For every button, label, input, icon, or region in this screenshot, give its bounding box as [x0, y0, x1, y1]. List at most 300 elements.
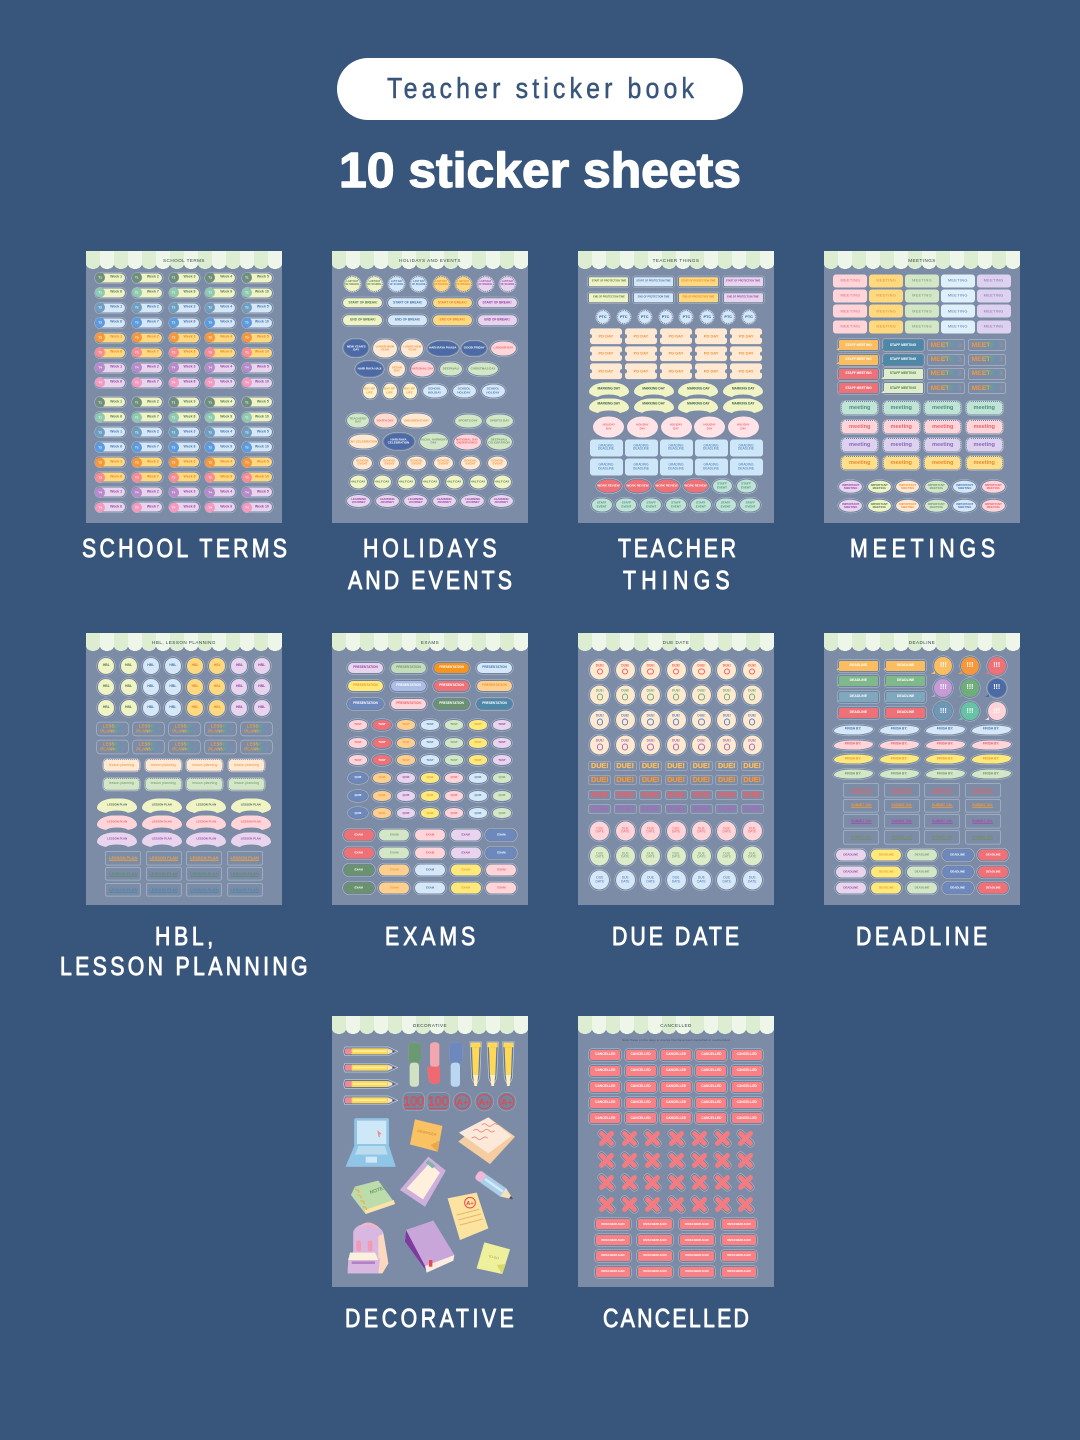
finish by pink [824, 740, 1020, 749]
HBL blobs row 1: HBL [103, 663, 110, 667]
lowercase meeting scalloped row 4: meeting [849, 460, 870, 466]
due date pink circles: DATE [596, 830, 604, 834]
blue alarm clock circles: DUE! [596, 714, 604, 718]
deadline flags steel [836, 692, 928, 702]
exam pills row 4: EXAM [497, 886, 506, 890]
test labels row 2: TEST [426, 740, 434, 744]
grading deadline row 1: GRADING [599, 443, 613, 447]
staff meeting bubbles and rainbow meeting row 4: STAFF MEETING [890, 386, 916, 390]
presentation pills row 2: PRESENTATION [396, 683, 421, 687]
term 2 week stickers 6-10: T2 [172, 321, 175, 325]
sheet title: CANCELLED [660, 1023, 692, 1028]
rescheduled labels row 3 [578, 1251, 774, 1261]
last day of school flowers: LAST DAY OF SCHOOL [478, 280, 493, 286]
term 4 week stickers 1-5: T4 [245, 366, 249, 370]
start of break stickers: START OF BREAK! [393, 300, 422, 304]
grading deadline row 2: GRADING [599, 463, 613, 467]
grading deadline row 1: DEADLINE [738, 447, 754, 451]
term 4 week stickers 1-5: T4 [208, 366, 212, 370]
due red labels: DUE! [642, 790, 659, 799]
work review and staff event stickers: STAFF EVENT [717, 482, 727, 489]
PD day tickets row 3 [590, 363, 762, 380]
red cross stickers row 4 [578, 1194, 774, 1214]
lesson plan bananas yellow: LESSON PLAN [152, 802, 172, 806]
PTC flowers: PTC [683, 315, 690, 319]
second set term 1 weeks 6-10: Week 9 [220, 414, 232, 418]
term 3 week stickers 6-10: T3 [208, 351, 212, 355]
start of protection time flags: START OF PROTECTION TIME [636, 279, 671, 282]
term 4 week stickers 1-5 [94, 362, 274, 374]
test labels row 3: TEST [450, 758, 458, 762]
cancelled labels row 2 [578, 1066, 774, 1076]
awning header [578, 251, 774, 269]
deadline pills row 1: DEADLINE [879, 853, 894, 857]
due purple labels: DUE! [616, 804, 634, 813]
green alarm clock circles: DUE! [723, 689, 731, 693]
second set term 4 weeks 6-10: Week 9 [220, 504, 232, 508]
grading deadline row 2: GRADING [739, 463, 753, 467]
second set term 1 weeks 1-5: T1 [135, 400, 139, 404]
due purple labels: DUE! [743, 804, 761, 813]
term 1 week stickers 1-5 [94, 272, 274, 284]
red alarm clock circles: DUE! [647, 663, 655, 667]
due yellow labels: DUE! [642, 761, 659, 770]
presentation pills row 1 [332, 663, 528, 673]
deadline pills row 1: DEADLINE [915, 853, 929, 857]
due orange labels: DUE! [591, 775, 609, 784]
rainbow lesson planning row 2: LESSON [139, 741, 157, 746]
due date blue circles: DUE [723, 876, 730, 880]
panel: school terms sheet [86, 251, 282, 523]
presentation pills row 3: PRESENTATION [353, 701, 378, 705]
rainbow lesson planning row 2 [86, 741, 282, 754]
grade stamps: A+ [501, 1097, 512, 1107]
school event blobs row 2: RACIAL HARMONY DAY [420, 437, 447, 445]
exclamation bubbles row 3 [932, 702, 1008, 720]
term 1 week stickers 1-5: Week 1 [110, 275, 122, 279]
presentation pills row 1: PRESENTATION [353, 665, 378, 669]
second set term 3 weeks 6-10: Week 6 [110, 474, 122, 478]
lesson plan bananas purple: LESSON PLAN [241, 836, 261, 840]
deadline flags orange: DEADLINE [897, 663, 914, 667]
staff meeting bubbles and rainbow meeting row 3 [824, 369, 1020, 379]
term 3 week stickers 6-10: Week 8 [184, 350, 196, 354]
lowercase meeting scalloped row 4: meeting [932, 460, 953, 466]
staff meeting bubbles and rainbow meeting row 3: STAFF MEETING [890, 371, 916, 375]
second set term 2 weeks 6-10: T2 [98, 445, 102, 449]
finish by blue: FINISH BY: [937, 727, 953, 731]
second set term 3 weeks 6-10: Week 8 [184, 474, 196, 478]
finish by green: FINISH BY: [845, 771, 861, 775]
submit on purple [824, 815, 1020, 828]
due date pink circles: DUE [723, 826, 730, 830]
red alarm clock circles: DUE! [748, 663, 756, 667]
second set term 4 weeks 1-5: Week 3 [184, 489, 196, 493]
finish by pink: FINISH BY: [937, 742, 953, 746]
learning journey stickers: LEARNING JOURNEY [437, 497, 452, 504]
work review and staff event stickers: WORK REVIEW [655, 483, 678, 487]
due yellow labels [578, 762, 774, 770]
quiz labels row 1 [332, 773, 528, 783]
cancelled labels row 5: CANCELLED [630, 1116, 651, 1120]
presentation pills row 1: PRESENTATION [396, 665, 421, 669]
quiz labels row 3: QUIZ [475, 811, 481, 815]
grading deadline row 2: DEADLINE [598, 466, 614, 470]
purple alarm clock circles: DUE! [596, 739, 604, 743]
PD day tickets row 1 [590, 328, 762, 344]
cancelled labels row 1: CANCELLED [666, 1052, 686, 1056]
term 3 week stickers 6-10: T3 [245, 351, 249, 355]
rainbow lesson planning row 1: PLANNING [244, 728, 268, 733]
exam pills row 4 [332, 883, 528, 894]
holiday day blobs [593, 416, 759, 438]
panel: deadline sheet [824, 633, 1020, 905]
term 2 week stickers 6-10: Week 8 [184, 320, 196, 324]
badge: teacher sticker book: Teacher sticker book [387, 72, 694, 104]
meeting labels row 2: MEETING [912, 293, 932, 298]
end of break stickers: END OF BREAK! [440, 317, 465, 321]
due yellow labels: DUE! [743, 761, 761, 770]
work review and staff event stickers: WORK REVIEW [626, 483, 649, 487]
cancelled labels row 4: CANCELLED [595, 1100, 615, 1104]
start of protection time flags: START OF PROTECTION TIME [726, 279, 760, 282]
term 3 week stickers 6-10 [94, 347, 274, 359]
second set term 3 weeks 6-10: T3 [208, 475, 212, 479]
start of protection time flags: START OF PROTECTION TIME [592, 279, 626, 282]
grading deadline row 2 [590, 458, 763, 476]
cancelled labels row 3: CANCELLED [701, 1084, 722, 1088]
staff meeting bubbles and rainbow meeting row 3: MEETING [972, 370, 1002, 377]
deadline pills row 3: DEADLINE [879, 885, 894, 889]
due date green circles: DATE [596, 855, 604, 859]
second set term 3 weeks 6-10: T3 [98, 475, 102, 479]
PD day tickets row 1: PD DAY [669, 333, 683, 338]
due date blue circles: DATE [672, 879, 680, 883]
test labels row 1: TEST [474, 722, 482, 726]
outlined lesson plan green: LESSON PLAN [150, 871, 178, 876]
cancelled labels row 3: CANCELLED [630, 1084, 651, 1088]
due orange labels: DUE! [693, 775, 710, 784]
outlined lesson plan green: LESSON PLAN [109, 871, 137, 876]
end of protection time flags [588, 292, 764, 304]
exam pills row 2: EXAM [354, 850, 363, 854]
due date blue circles [578, 871, 774, 890]
red cross stickers row 3 [578, 1172, 774, 1192]
term 4 week stickers 6-10 [94, 377, 274, 389]
due orange labels [578, 776, 774, 784]
caption: cancelled: CANCELLED [603, 1304, 749, 1334]
meeting labels row 3: MEETING [876, 308, 896, 313]
due date pink circles: DATE [646, 830, 655, 834]
staff meeting bubbles and rainbow meeting row 1 [824, 340, 1020, 350]
caption: school terms: SCHOOL TERMS [82, 534, 287, 564]
cancelled labels row 4: CANCELLED [737, 1100, 757, 1104]
marking day bananas row 2 [589, 398, 763, 413]
holiday day blobs: HOLIDAY [737, 423, 749, 427]
grading deadline row 1: GRADING [739, 443, 753, 447]
important meeting ovals row 2: IMPORTANT MEETING [899, 502, 916, 509]
second set term 4 weeks 6-10: Week 8 [184, 504, 196, 508]
public holiday blobs row 2: VESAK DAY [392, 365, 402, 372]
school event stickers: SCHOOL EVENT [410, 458, 423, 466]
second set term 2 weeks 1-5: T2 [245, 430, 249, 434]
second set term 1 weeks 6-10 [94, 411, 274, 423]
term 2 week stickers 6-10: T2 [135, 321, 139, 325]
rainbow lesson planning row 1: PLANNING [172, 728, 196, 733]
due orange labels: DUE! [616, 775, 634, 784]
grading deadline row 2: GRADING [634, 463, 648, 467]
quiz labels row 1: QUIZ [379, 775, 385, 779]
term 1 week stickers 6-10: T1 [98, 291, 102, 295]
due purple labels: DUE! [642, 804, 659, 813]
grade stamps: 100 [428, 1095, 449, 1109]
deadline pills row 1: DEADLINE [950, 853, 965, 857]
panel: exams sheet [332, 633, 528, 905]
second set term 4 weeks 1-5: Week 5 [257, 489, 269, 493]
HBL blobs row 1 [86, 658, 282, 674]
awning header [578, 633, 774, 651]
due date blue circles: DATE [722, 879, 731, 883]
second set term 1 weeks 1-5: T1 [172, 400, 175, 404]
grading deadline row 1: GRADING [704, 443, 718, 447]
lesson plan bananas pink: LESSON PLAN [241, 819, 261, 823]
marking day bananas row 2: MARKING DAY [598, 402, 620, 406]
second set term 2 weeks 1-5: T2 [172, 430, 175, 434]
grading deadline row 2: GRADING [669, 463, 683, 467]
deadline pills row 3: DEADLINE [915, 885, 929, 889]
HBL blobs row 3: HBL [214, 705, 221, 709]
important meeting ovals row 1: IMPORTANT MEETING [842, 483, 859, 490]
test labels row 2: TEST [474, 740, 482, 744]
due orange labels: DUE! [743, 775, 761, 784]
test labels row 2: TEST [354, 740, 362, 744]
deadline pills row 1: DEADLINE [843, 853, 858, 857]
PD day tickets row 3: PD DAY [739, 368, 754, 373]
term 3 week stickers 6-10: Week 6 [110, 350, 122, 354]
term 2 week stickers 1-5: Week 4 [220, 305, 232, 309]
term 4 week stickers 6-10: T4 [135, 381, 139, 385]
rainbow lesson planning row 1: LESSON [139, 723, 157, 728]
school holiday blobs: SCHOOL HOLIDAY [486, 387, 500, 394]
second set term 1 weeks 1-5: Week 5 [257, 399, 269, 403]
grading deadline row 1: DEADLINE [633, 447, 649, 451]
staff meeting bubbles and rainbow meeting row 2: MEETING [931, 356, 961, 363]
awning header [578, 1016, 774, 1034]
finish by yellow: FINISH BY: [937, 757, 953, 761]
term 4 week stickers 6-10: T4 [172, 381, 175, 385]
marking day bananas row 1: MARKING DAY [732, 386, 754, 390]
end of break stickers: END OF BREAK! [484, 317, 510, 321]
rescheduled labels row 4 [578, 1267, 774, 1277]
rainbow lesson planning row 1: PLANNING [100, 728, 124, 733]
work review and staff event stickers: WORK REVIEW [597, 483, 620, 487]
exam pills row 1: EXAM [497, 833, 506, 837]
term 4 week stickers 6-10: Week 7 [147, 380, 159, 384]
exam pills row 2: EXAM [426, 850, 434, 854]
term 4 week stickers 6-10: Week 10 [255, 380, 269, 384]
public holiday blobs row 1 [342, 338, 518, 359]
HBL blobs row 2: HBL [214, 684, 221, 688]
term 3 week stickers 1-5: T3 [208, 336, 212, 340]
term 3 week stickers 1-5: Week 3 [184, 335, 196, 339]
second set term 2 weeks 1-5: T2 [135, 430, 139, 434]
caption: exams: EXAMS [385, 922, 475, 952]
term 2 week stickers 1-5: T2 [98, 306, 102, 310]
presentation pills row 3: PRESENTATION [396, 701, 421, 705]
last day of school flowers: LAST DAY OF SCHOOL [345, 280, 359, 286]
marking day bananas row 1: MARKING DAY [598, 386, 620, 390]
term 3 week stickers 1-5: Week 1 [110, 335, 122, 339]
quiz labels row 1: QUIZ [403, 775, 409, 779]
PD day tickets row 2: PD DAY [739, 351, 754, 356]
grade stamps [403, 1092, 516, 1111]
blue alarm clock circles [578, 710, 774, 730]
term 2 week stickers 1-5: Week 5 [257, 305, 269, 309]
staff meeting bubbles and rainbow meeting row 2: STAFF MEETING [845, 357, 872, 361]
red alarm clock circles: DUE! [596, 663, 604, 667]
quiz labels row 2: QUIZ [499, 793, 505, 797]
PTC flowers: PTC [745, 315, 753, 319]
cancelled labels row 2: CANCELLED [701, 1068, 722, 1072]
second set term 4 weeks 6-10: T4 [245, 505, 249, 509]
finish by pink: FINISH BY: [845, 742, 861, 746]
grading deadline row 1: DEADLINE [598, 447, 614, 451]
due date pink circles: DATE [697, 830, 706, 834]
staff meeting bubbles and rainbow meeting row 4: STAFF MEETING [845, 386, 872, 390]
exclamation bubbles row 3: !!! [993, 708, 1000, 715]
term 4 week stickers 6-10: Week 6 [110, 380, 122, 384]
rainbow lesson planning row 2: PLANNING [136, 746, 160, 751]
finish by blue: FINISH BY: [983, 727, 999, 731]
start of break stickers [342, 296, 518, 309]
caption: teacher things [618, 534, 736, 596]
presentation pills row 2: PRESENTATION [439, 683, 464, 687]
second set term 3 weeks 1-5: Week 3 [184, 459, 196, 463]
lowercase meeting scalloped row 2 [824, 421, 1020, 433]
deadline pills row 3: DEADLINE [843, 885, 858, 889]
submit on orange [824, 799, 1020, 812]
exam pills row 1: EXAM [426, 833, 434, 837]
meeting labels row 3 [824, 305, 1020, 318]
outlined lesson plan blue: LESSON PLAN [109, 887, 137, 892]
submit on orange: SUBMIT ON: [972, 803, 993, 807]
test labels row 2: TEST [450, 740, 458, 744]
important meeting ovals row 1: IMPORTANT MEETING [928, 483, 945, 490]
cancelled labels row 3: CANCELLED [666, 1084, 686, 1088]
due date blue circles: DUE [673, 876, 679, 880]
due purple labels: DUE! [591, 804, 609, 813]
paper stack [458, 1117, 515, 1164]
term 3 week stickers 1-5: Week 2 [147, 335, 159, 339]
meeting labels row 1: MEETING [876, 278, 896, 283]
term 3 week stickers 1-5: Week 4 [220, 335, 232, 339]
learning journey stickers: LEARNING JOURNEY [465, 497, 480, 504]
term 1 week stickers 1-5: Week 5 [257, 275, 269, 279]
presentation pills row 2 [332, 681, 528, 691]
cancelled labels row 5: CANCELLED [595, 1116, 615, 1120]
clipboard [400, 1157, 446, 1207]
work review and staff event stickers [596, 478, 758, 494]
due date blue circles: DUE [596, 876, 603, 880]
green lesson planning labels: lesson planning [234, 781, 259, 785]
PTC flowers: PTC [641, 315, 648, 319]
term 4 week stickers 1-5: T4 [172, 366, 175, 370]
graded paper: A+ [466, 1201, 474, 1207]
finish by yellow: FINISH BY: [845, 757, 861, 761]
due date pink circles: DUE [622, 826, 629, 830]
second set term 3 weeks 1-5: T3 [172, 460, 175, 464]
school event blobs row 1: YOUTH DAY [376, 418, 394, 422]
test labels row 3: TEST [474, 758, 482, 762]
exam pills row 2: EXAM [497, 850, 506, 854]
grade stamps: A+ [479, 1097, 490, 1107]
lowercase meeting scalloped row 3: meeting [974, 442, 995, 448]
cancelled labels row 2: CANCELLED [666, 1068, 686, 1072]
purple book [405, 1221, 454, 1273]
cancelled labels row 4 [578, 1098, 774, 1108]
due date green circles: DATE [672, 855, 680, 859]
lowercase meeting scalloped row 1: meeting [974, 405, 995, 411]
due red labels: DUE! [718, 790, 736, 799]
second set term 4 weeks 1-5: T4 [135, 490, 139, 494]
cancelled labels row 1: CANCELLED [701, 1052, 722, 1056]
rescheduled labels row 2 [578, 1235, 774, 1245]
decorative illustrations [332, 1016, 528, 1287]
HBL blobs row 3: HBL [192, 705, 199, 709]
due date pink circles: DATE [748, 830, 756, 834]
submit on green: SUBMIT ON: [932, 834, 953, 838]
grading deadline row 1: GRADING [634, 443, 648, 447]
term 1 week stickers 1-5: T1 [135, 276, 139, 280]
holiday day blobs: HOLIDAY [670, 423, 682, 427]
school holiday blobs: DAY OF LIFE [384, 387, 395, 394]
second set term 4 weeks 6-10: Week 10 [255, 504, 269, 508]
school event blobs row 1: TEACHERS' DAY [349, 416, 367, 424]
holiday day blobs: DAY [740, 426, 746, 430]
PTC flowers: PTC [662, 315, 669, 319]
second set term 3 weeks 6-10: Week 10 [255, 474, 269, 478]
second set term 4 weeks 6-10 [94, 501, 274, 513]
lowercase meeting scalloped row 2: meeting [932, 424, 953, 430]
submit on green: SUBMIT ON: [972, 834, 993, 838]
HBL blobs row 3: HBL [103, 705, 110, 709]
test labels row 1: TEST [450, 722, 458, 726]
deadline flags red: DEADLINE [897, 710, 914, 714]
due purple labels: DUE! [667, 804, 685, 813]
outlined lesson plan blue: LESSON PLAN [190, 887, 218, 892]
yellow sticky note [477, 1242, 510, 1274]
due purple labels: DUE! [718, 804, 736, 813]
important meeting ovals row 1: IMPORTANT MEETING [871, 483, 888, 490]
second set term 4 weeks 1-5: T4 [172, 490, 175, 494]
exam pills row 1: EXAM [390, 833, 398, 837]
exam pills row 1 [332, 830, 528, 841]
HBL blobs row 2 [86, 679, 282, 695]
exam pills row 2: EXAM [390, 850, 398, 854]
panel: decorative sheet [332, 1016, 528, 1287]
grading deadline row 1 [590, 440, 763, 456]
second set term 4 weeks 6-10: Week 6 [110, 504, 122, 508]
grading deadline row 2: DEADLINE [703, 466, 719, 470]
finish by green: FINISH BY: [937, 771, 953, 775]
end of protection time flags: END OF PROTECTION TIME [682, 295, 714, 298]
cancelled labels row 4: CANCELLED [630, 1100, 651, 1104]
last day of school flowers: LAST DAY OF SCHOOL [412, 280, 426, 286]
rescheduled labels row 3: RESCHEDULED [643, 1253, 667, 1257]
green alarm clock circles: DUE! [748, 689, 756, 693]
due purple labels [578, 805, 774, 813]
term 3 week stickers 1-5: T3 [98, 336, 102, 340]
